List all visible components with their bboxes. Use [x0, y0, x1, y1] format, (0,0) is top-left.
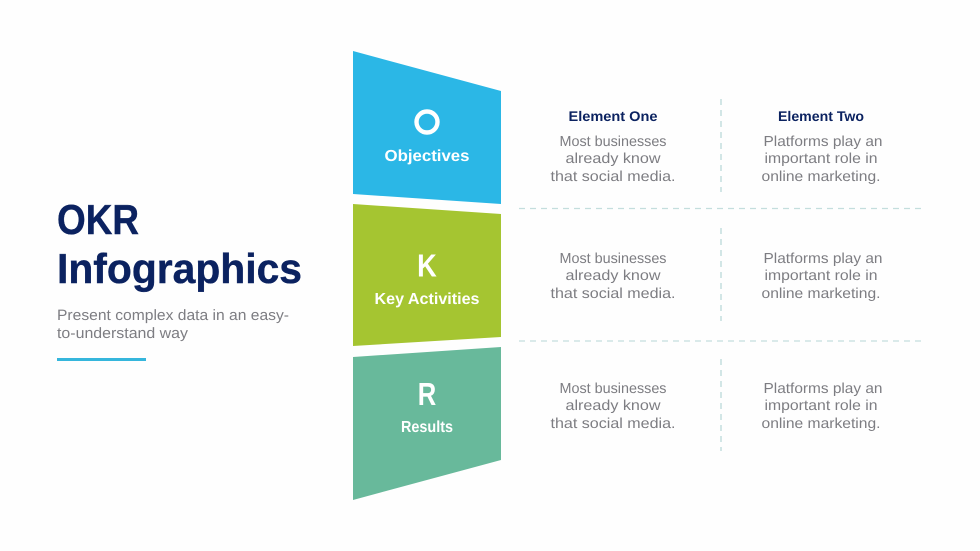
text block: row 2 element two: important role in	[764, 268, 878, 284]
letter K: K	[417, 248, 437, 284]
divider: row 2	[519, 340, 923, 342]
text block: row 3 element one: that social media.	[550, 416, 676, 432]
text block: row 2 element one: Most businesses	[560, 251, 666, 267]
letter R: R	[418, 376, 436, 412]
text block: row 3 element one: already know	[566, 398, 661, 414]
divider: column row 1	[720, 99, 722, 192]
text block: row 1 element one: that social media.	[550, 169, 676, 185]
text block: row 2 element two: online marketing.	[762, 286, 880, 302]
heading: element two: Element Two	[778, 108, 864, 124]
title: Infographics	[57, 245, 302, 292]
text block: row 2 element one	[550, 251, 676, 302]
text block: row 2 element one: already know	[566, 268, 661, 284]
subtitle	[57, 307, 289, 342]
letter O	[416, 112, 438, 132]
text block: row 3 element two	[762, 381, 882, 432]
text block: row 2 element two	[762, 251, 882, 302]
text block: row 2 element two: Platforms play an	[764, 251, 882, 267]
label: key activities: Key Activities	[374, 291, 480, 308]
text block: row 1 element two	[762, 134, 882, 185]
text block: row 3 element two: online marketing.	[762, 416, 880, 432]
divider: row 1	[519, 208, 923, 210]
text block: row 1 element two: important role in	[764, 151, 878, 167]
panel: key activities	[353, 204, 501, 346]
heading: element one: Element One	[568, 108, 658, 124]
accent underline	[57, 358, 146, 361]
text block: row 3 element one	[550, 381, 676, 432]
text block: row 1 element one	[550, 134, 676, 185]
divider: column row 2	[720, 228, 722, 321]
text block: row 1 element two: online marketing.	[762, 169, 880, 185]
text block: row 2 element one: that social media.	[550, 286, 676, 302]
panel: objectives	[353, 51, 501, 204]
text block: row 1 element one: already know	[566, 151, 661, 167]
text block: row 1 element two: Platforms play an	[764, 134, 882, 150]
subtitle: Present complex data in an easy-	[57, 307, 289, 324]
text block: row 3 element one: Most businesses	[560, 381, 666, 397]
text block: row 1 element one: Most businesses	[560, 134, 666, 150]
text block: row 3 element two: important role in	[764, 398, 878, 414]
text block: row 3 element two: Platforms play an	[764, 381, 882, 397]
panel: results	[353, 347, 501, 500]
label: objectives: Objectives	[384, 148, 470, 165]
title: OKR	[57, 196, 139, 243]
subtitle: to-understand way	[57, 325, 189, 342]
divider: column row 3	[720, 359, 722, 451]
title	[57, 196, 302, 292]
label: results: Results	[401, 419, 453, 436]
